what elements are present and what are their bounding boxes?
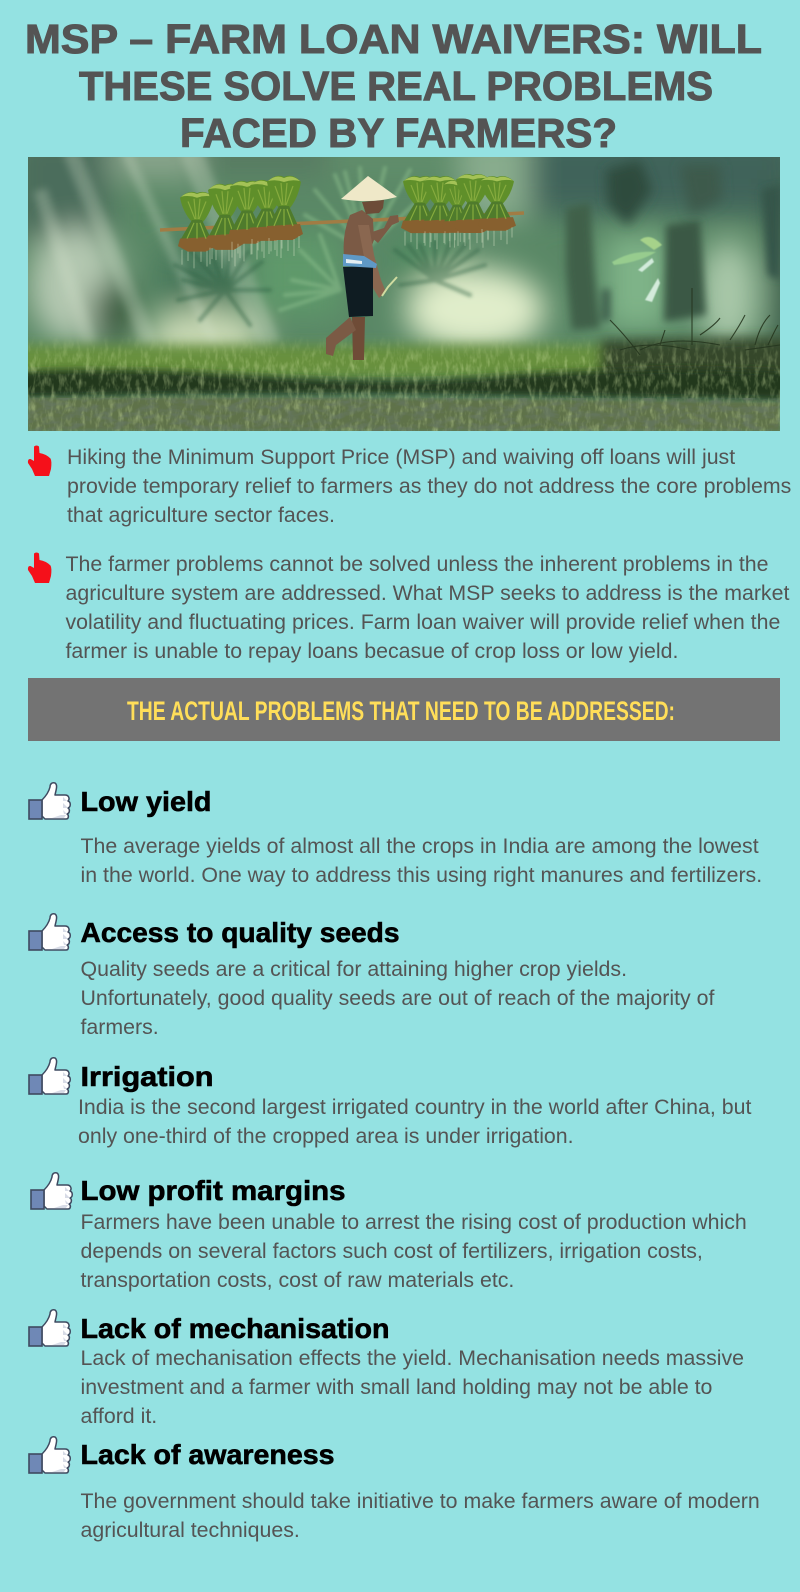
item: access to quality seeds: Unfortunately, good quality seeds are out of reach of the majority of — [80, 986, 714, 1010]
light rays — [40, 150, 270, 345]
bullet 1: red pointing hand — [28, 445, 51, 476]
title: THESE SOLVE REAL PROBLEMS — [79, 63, 713, 109]
item: lack of mechanisation: Lack of mechanisation — [80, 1313, 390, 1344]
paragraph 2: farmer is unable to repay loans becasue of crop loss or low yield. — [66, 639, 678, 663]
item: irrigation — [29, 1058, 751, 1148]
item: lack of awareness: The government should take initiative to make farmers aware of modern — [80, 1489, 760, 1513]
paragraph 2: agriculture system are addressed. What MSP seeks to address is the market — [66, 581, 789, 605]
paragraph 1: Hiking the Minimum Support Price (MSP) and waiving off loans will just — [67, 445, 735, 469]
leaves — [612, 237, 662, 302]
paragraph 2 — [66, 552, 789, 663]
item: lack of mechanisation: afford it. — [80, 1404, 157, 1428]
item: irrigation: only one-third of the cropped area is under irrigation. — [78, 1124, 574, 1148]
title — [25, 16, 762, 156]
item: lack of awareness — [29, 1437, 760, 1542]
item: lack of awareness: Lack of awareness — [80, 1439, 334, 1470]
paragraph 1: provide temporary relief to farmers as they do not address the core problems — [67, 474, 791, 498]
banner — [28, 678, 780, 741]
icon: thumbs up — [29, 1437, 70, 1473]
item: low profit margins: Low profit margins — [80, 1175, 346, 1206]
icon: thumbs up — [31, 1173, 72, 1209]
paragraph 1: that agriculture sector faces. — [67, 503, 335, 527]
palm fans — [175, 168, 485, 325]
paragraph 1 — [67, 445, 791, 527]
item: lack of awareness: agricultural techniques. — [80, 1518, 300, 1542]
item: access to quality seeds: farmers. — [80, 1015, 159, 1039]
item: low yield: The average yields of almost all the crops in India are among the lowest — [80, 834, 759, 858]
icon: thumbs up — [29, 914, 70, 950]
bullet 2: red pointing hand — [28, 552, 51, 583]
paragraph 2: The farmer problems cannot be solved unless the inherent problems in the — [66, 552, 769, 576]
pole — [160, 213, 524, 230]
icon: thumbs up — [29, 783, 70, 819]
item: low yield: in the world. One way to address this using right manures and fertilizers. — [80, 863, 762, 887]
title: FACED BY FARMERS? — [180, 110, 617, 156]
icon: thumbs up — [29, 1310, 70, 1346]
item: access to quality seeds: Quality seeds are a critical for attaining higher crop yields. — [80, 957, 627, 981]
item: irrigation: Irrigation — [80, 1061, 214, 1092]
item: low yield — [29, 783, 762, 887]
item: irrigation: India is the second largest irrigated country in the world after China, but — [78, 1095, 751, 1119]
item: access to quality seeds: Access to quality seeds — [80, 917, 400, 948]
icon: thumbs up — [29, 1058, 70, 1094]
item: low yield: Low yield — [80, 786, 212, 817]
item: lack of mechanisation: Lack of mechanisation effects the yield. Mechanisation needs massive — [80, 1346, 744, 1370]
rice bundles — [178, 174, 516, 268]
grass — [10, 337, 800, 385]
item: access to quality seeds — [29, 914, 714, 1039]
item: lack of mechanisation — [29, 1310, 744, 1428]
paragraph 2: volatility and fluctuating prices. Farm loan waiver will provide relief when the — [66, 610, 780, 634]
item: low profit margins: transportation costs, cost of raw materials etc. — [80, 1268, 514, 1292]
weeds — [610, 288, 780, 355]
item: low profit margins: Farmers have been unable to arrest the rising cost of production which — [80, 1210, 747, 1234]
man — [326, 176, 399, 360]
item: low profit margins — [31, 1173, 747, 1292]
title: MSP – FARM LOAN WAIVERS: WILL — [25, 16, 762, 62]
trunks — [566, 185, 780, 330]
item: lack of mechanisation: investment and a farmer with small land holding may not be able to — [80, 1375, 712, 1399]
photo: farmer carrying rice seedlings — [28, 157, 780, 431]
item: low profit margins: depends on several factors such cost of fertilizers, irrigation costs, — [80, 1239, 703, 1263]
